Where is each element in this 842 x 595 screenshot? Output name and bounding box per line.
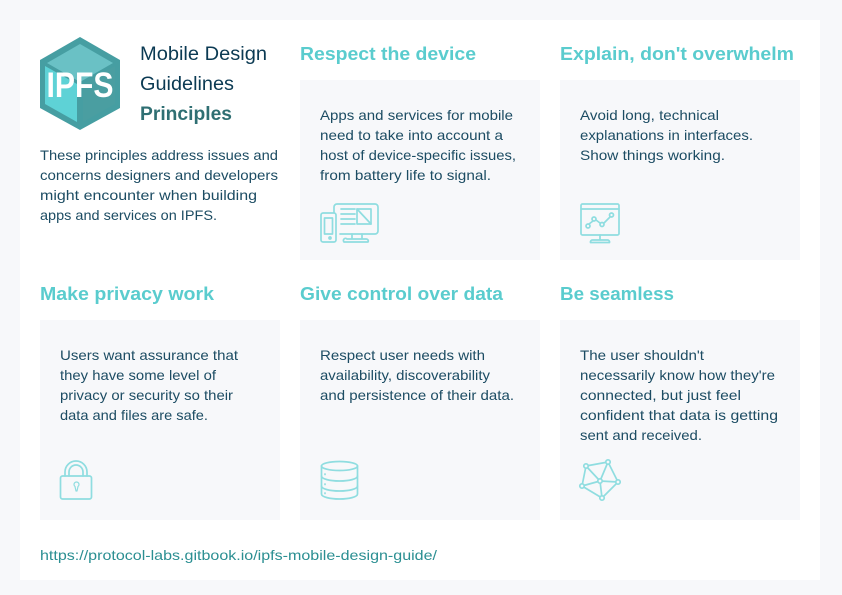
icon: IPFS hexagon logo: IPFS xyxy=(46,66,114,105)
icon: padlock xyxy=(60,461,92,499)
card xyxy=(560,320,800,520)
text block xyxy=(580,347,778,443)
text block: host of device-specific issues, xyxy=(320,147,516,163)
text block: The user shouldn't xyxy=(580,347,704,363)
text block: from battery life to signal. xyxy=(320,167,491,183)
text block: connected, but just feel xyxy=(580,387,741,403)
panel: header and intro xyxy=(40,37,278,223)
card xyxy=(300,80,540,260)
title xyxy=(140,44,267,125)
intro text: apps and services on IPFS. xyxy=(40,207,217,223)
text block xyxy=(580,107,753,163)
text block: they have some level of xyxy=(60,367,216,383)
text block: Users want assurance that xyxy=(60,347,238,363)
title: Mobile Design xyxy=(140,44,267,65)
heading: Explain, don't overwhelm xyxy=(560,44,794,64)
card xyxy=(560,80,800,260)
text block: and persistence of their data. xyxy=(320,387,514,403)
icon: network mesh xyxy=(580,460,620,500)
text block: necessarily know how they're xyxy=(580,367,775,383)
text block xyxy=(320,107,516,183)
heading: Make privacy work xyxy=(40,284,215,304)
text block: confident that data is getting xyxy=(580,407,778,423)
text block: Apps and services for mobile xyxy=(320,107,513,123)
intro text: concerns designers and developers xyxy=(40,167,278,183)
icon: database xyxy=(322,462,358,499)
panel: give control over data xyxy=(300,284,540,520)
intro text: might encounter when building xyxy=(40,187,257,203)
text block: Show things working. xyxy=(580,147,725,163)
intro text: These principles address issues and xyxy=(40,147,278,163)
text block: Avoid long, technical xyxy=(580,107,719,123)
panel: explain, don't overwhelm xyxy=(560,44,800,260)
text block xyxy=(320,347,514,403)
icon: monitor with line chart xyxy=(581,204,619,242)
text block: availability, discoverability xyxy=(320,367,490,383)
heading: Respect the device xyxy=(300,44,476,64)
link: guide url: https://protocol-labs.gitbook.io/ipfs-mobile-design-guide/ xyxy=(40,547,437,563)
icon: IPFS hexagon logo xyxy=(40,37,120,130)
text block: sent and received. xyxy=(580,427,702,443)
title: Principles xyxy=(140,104,232,125)
card xyxy=(300,320,540,520)
text block: privacy or security so their xyxy=(60,387,233,403)
panel: make privacy work xyxy=(40,284,280,520)
title: Guidelines xyxy=(140,74,234,95)
text block: need to take into account a xyxy=(320,127,503,143)
text block: data and files are safe. xyxy=(60,407,208,423)
card xyxy=(40,320,280,520)
icon: phone and desktop xyxy=(321,204,378,242)
text block xyxy=(60,347,238,423)
panel: be seamless xyxy=(560,284,800,520)
panel: respect the device xyxy=(300,44,540,260)
text block: explanations in interfaces. xyxy=(580,127,753,143)
text block: Respect user needs with xyxy=(320,347,485,363)
intro text xyxy=(40,147,278,223)
heading: Give control over data xyxy=(300,284,504,304)
heading: Be seamless xyxy=(560,284,674,304)
